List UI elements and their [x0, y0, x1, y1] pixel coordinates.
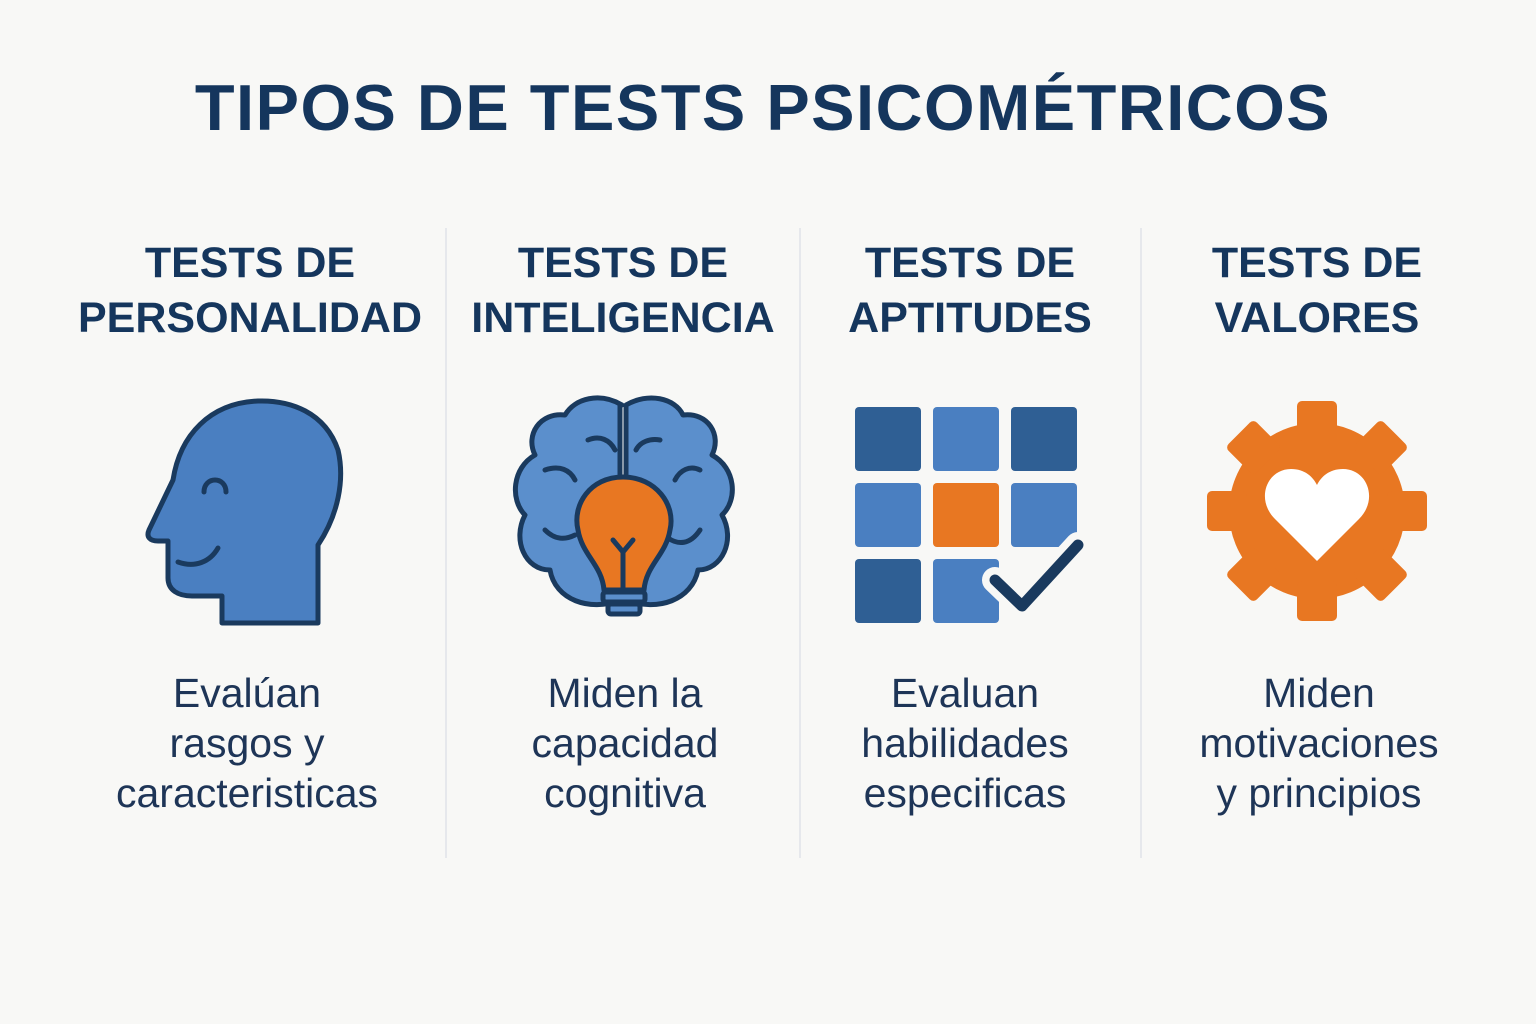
heading: valores: VALORES — [1215, 294, 1419, 342]
icon: head — [148, 401, 341, 623]
heading: personalidad — [78, 239, 422, 342]
text: valores: motivaciones — [1199, 720, 1439, 766]
text: aptitudes: Evaluan — [891, 670, 1039, 716]
text: aptitudes: especificas — [864, 770, 1066, 816]
heading: personalidad: PERSONALIDAD — [78, 294, 422, 342]
heading: valores: TESTS DE — [1212, 239, 1422, 287]
icon: brain with bulb — [515, 398, 732, 614]
text: inteligencia: cognitiva — [544, 770, 706, 816]
text: personalidad — [116, 670, 378, 816]
text: aptitudes — [861, 670, 1069, 816]
text: personalidad: caracteristicas — [116, 770, 378, 816]
icon: aptitude grid with check — [855, 407, 1078, 623]
heading: inteligencia — [471, 239, 775, 342]
text: inteligencia: capacidad — [532, 720, 718, 766]
text: personalidad: Evalúan — [173, 670, 321, 716]
text: personalidad: rasgos y — [170, 720, 324, 766]
text: inteligencia — [532, 670, 718, 816]
text: inteligencia: Miden la — [548, 670, 702, 716]
heading: personalidad: TESTS DE — [145, 239, 355, 287]
heading: valores — [1212, 239, 1422, 342]
heading: inteligencia: INTELIGENCIA — [471, 294, 775, 342]
text: aptitudes: habilidades — [861, 720, 1069, 766]
heading: aptitudes — [848, 239, 1092, 342]
heading: inteligencia: TESTS DE — [518, 239, 728, 287]
heading: aptitudes: APTITUDES — [848, 294, 1092, 342]
icon: gear with heart — [1207, 401, 1427, 621]
heading: aptitudes: TESTS DE — [865, 239, 1075, 287]
text: valores: y principios — [1216, 770, 1422, 816]
text: valores: Miden — [1263, 670, 1375, 716]
text: valores — [1199, 670, 1439, 816]
title: TIPOS DE TESTS PSICOMÉTRICOS — [195, 71, 1331, 144]
